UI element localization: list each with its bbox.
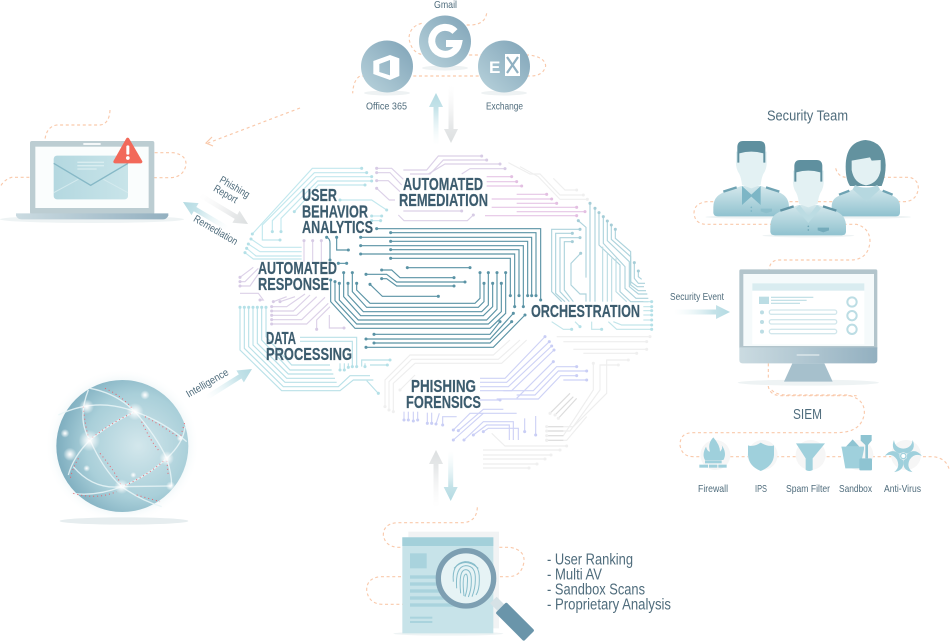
- list: forensic analysis methods: - Sandbox Scans: [547, 582, 645, 598]
- person shadows: [705, 215, 911, 219]
- icon: IPS shield: [748, 443, 774, 471]
- circuit traces: cyan left chevrons: [245, 239, 302, 259]
- circuit traces: right stubs and below orchestration: [552, 302, 652, 329]
- heading: user behavior analytics: BEHAVIOR: [302, 202, 368, 222]
- globe glowing nodes: [61, 390, 183, 494]
- globe sphere: [56, 380, 188, 512]
- heading: data processing: DATA: [266, 328, 296, 348]
- panel: threat intelligence globe: [45, 369, 200, 525]
- heading: orchestration: ORCHESTRATION: [531, 301, 640, 321]
- heading: automated remediation: [399, 174, 488, 210]
- circuit traces: purple: [240, 156, 505, 329]
- circuit traces: dark teal orchestration core: [327, 229, 541, 347]
- report content: [410, 553, 460, 623]
- icon: anti-virus biohazard: [884, 440, 922, 473]
- heading: automated remediation: REMEDIATION: [399, 190, 488, 210]
- panel: laptop with phishing alert: [0, 139, 184, 223]
- envelope: [54, 156, 128, 199]
- label: phishing report: Report: [211, 183, 240, 206]
- laptop base: [16, 213, 168, 219]
- circuit traces: right plain verticals: [603, 247, 627, 302]
- panel: mail services: [361, 0, 530, 112]
- label: security event: Security Event: [670, 291, 724, 303]
- globe halo: [45, 369, 200, 523]
- icon: exchange: [478, 40, 530, 96]
- heading: phishing forensics: [406, 376, 481, 412]
- brain circuit diagram: [240, 156, 652, 468]
- heading: user behavior analytics: ANALYTICS: [302, 217, 373, 237]
- heading: automated response: [258, 258, 337, 294]
- panel: security team people: [705, 140, 911, 237]
- magnifier handle: [488, 595, 535, 641]
- icon: gmail: [419, 16, 471, 70]
- monitor speaker line: [797, 354, 819, 356]
- globe red dotted routes: [70, 388, 185, 502]
- heading: automated remediation: AUTOMATED: [403, 174, 483, 194]
- magnifier lens: [438, 551, 494, 606]
- icon: exchange: E: [489, 58, 500, 77]
- label: remediation: Remediation: [191, 213, 240, 248]
- person: man left: [713, 141, 789, 216]
- report title bar: [402, 537, 493, 546]
- label: exchange: Exchange: [486, 100, 523, 112]
- dashed connector: forensics: [367, 507, 524, 604]
- label: IPS: IPS: [755, 483, 767, 495]
- label: office 365: Office 365: [366, 100, 407, 112]
- icon: office 365: [361, 40, 413, 96]
- circuit traces: blue-gray right: [552, 203, 648, 302]
- circuit traces: pink: [485, 177, 585, 216]
- monitor bezel: [739, 269, 877, 349]
- laptop camera: [83, 143, 101, 145]
- dashed arrow: to laptop: [206, 108, 300, 146]
- label: security team: Security Team: [767, 108, 848, 124]
- label: phishing report: Phishing: [217, 174, 252, 201]
- dashed connector: defense tools: [680, 390, 949, 470]
- person: man front: [762, 160, 854, 237]
- heading: data processing: PROCESSING: [266, 344, 352, 364]
- panel: SIEM monitor: [738, 269, 879, 386]
- icon: firewall: [699, 437, 727, 468]
- arrow: intelligence: [203, 363, 256, 404]
- panel: defense tools: [698, 435, 922, 495]
- laptop shadow: [0, 216, 184, 223]
- list: forensic analysis methods: - User Ranking: [547, 552, 633, 568]
- icon: warning triangle: [115, 139, 141, 162]
- arrow: security event: [674, 305, 730, 319]
- arrow: forensics up: [429, 450, 443, 508]
- dashed connector: cloud mail: [353, 13, 546, 93]
- person: woman: [832, 140, 900, 216]
- laptop screen: [35, 147, 149, 208]
- list: forensic analysis methods: - Multi AV: [547, 566, 603, 584]
- arrow: down from mail services: [444, 85, 458, 143]
- monitor screen: [743, 274, 874, 346]
- icon: fingerprint: [453, 562, 479, 597]
- dashed connector: security team and SIEM: [694, 168, 918, 396]
- label: sandbox: Sandbox: [839, 483, 873, 495]
- heading: data processing: [266, 328, 352, 364]
- dashed connector: laptop: [0, 110, 186, 187]
- monitor shadow: [738, 380, 879, 386]
- arrow: forensics down: [444, 451, 458, 501]
- label: firewall: Firewall: [698, 483, 728, 495]
- heading: automated response: RESPONSE: [258, 274, 329, 294]
- list: forensic analysis methods: [547, 552, 671, 614]
- globe shadow: [60, 517, 188, 525]
- circuit traces: gray upper right: [508, 163, 587, 199]
- monitor chin: [739, 347, 877, 363]
- icon: sandbox bucket and shovel: [841, 435, 872, 470]
- tool backdrops: [700, 440, 921, 470]
- dashboard window: [752, 283, 864, 344]
- label: anti-virus: Anti-Virus: [884, 483, 921, 495]
- circuit traces: periwinkle forensics: [404, 337, 587, 440]
- circuit traces: cyan upper left: [252, 168, 387, 240]
- panel: phishing forensics report: [393, 532, 535, 641]
- circuit traces: gray lower: [385, 337, 650, 468]
- brain headings: [258, 174, 640, 412]
- monitor stand: [784, 363, 833, 382]
- heading: phishing forensics: PHISHING: [411, 376, 476, 396]
- arrow: up to mail services: [429, 93, 443, 145]
- list: forensic analysis methods: - Proprietary Analysis: [547, 596, 671, 614]
- heading: phishing forensics: FORENSICS: [406, 392, 481, 412]
- label: SIEM: SIEM: [793, 406, 822, 423]
- heading: user behavior analytics: [302, 185, 373, 237]
- label: spam filter: Spam Filter: [786, 483, 830, 495]
- arrow: remediation: [179, 196, 231, 234]
- heading: automated response: AUTOMATED: [258, 258, 337, 278]
- icon: spam filter funnel: [796, 443, 825, 471]
- arrow: phishing report: [196, 189, 252, 230]
- circuit traces: cyan lower left: [240, 307, 390, 393]
- label: intelligence: Intelligence: [184, 366, 231, 400]
- report back sheet: [408, 532, 499, 628]
- globe arcs: [58, 388, 187, 507]
- laptop lid: [30, 141, 154, 214]
- heading: user behavior analytics: USER: [302, 185, 337, 205]
- circuit traces: gray diagonal pair: [547, 393, 577, 440]
- report page: [402, 537, 493, 633]
- report shadow: [393, 632, 503, 636]
